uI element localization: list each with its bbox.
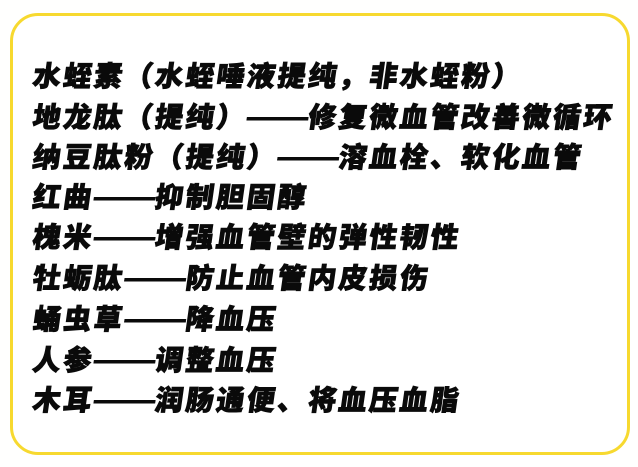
line: red yeast: 红曲——抑制胆固醇 — [31, 180, 311, 214]
line: cordyceps: 蛹虫草——降血压 — [31, 302, 280, 336]
line: oyster peptide: 牡蛎肽——防止血管内皮损伤 — [31, 261, 433, 295]
line: natto powder: 纳豆肽粉（提纯）——溶血栓、软化血管 — [31, 140, 586, 174]
line: sophora: 槐米——增强血管壁的弹性韧性 — [31, 220, 464, 254]
line: ginseng: 人参——调整血压 — [31, 343, 280, 377]
line: earthworm peptide: 地龙肽（提纯）——修复微血管改善微循环 — [31, 100, 617, 134]
line: leech extract: 水蛭素（水蛭唾液提纯，非水蛭粉） — [31, 61, 525, 92]
line: black fungus: 木耳——润肠通便、将血压血脂 — [31, 383, 464, 417]
